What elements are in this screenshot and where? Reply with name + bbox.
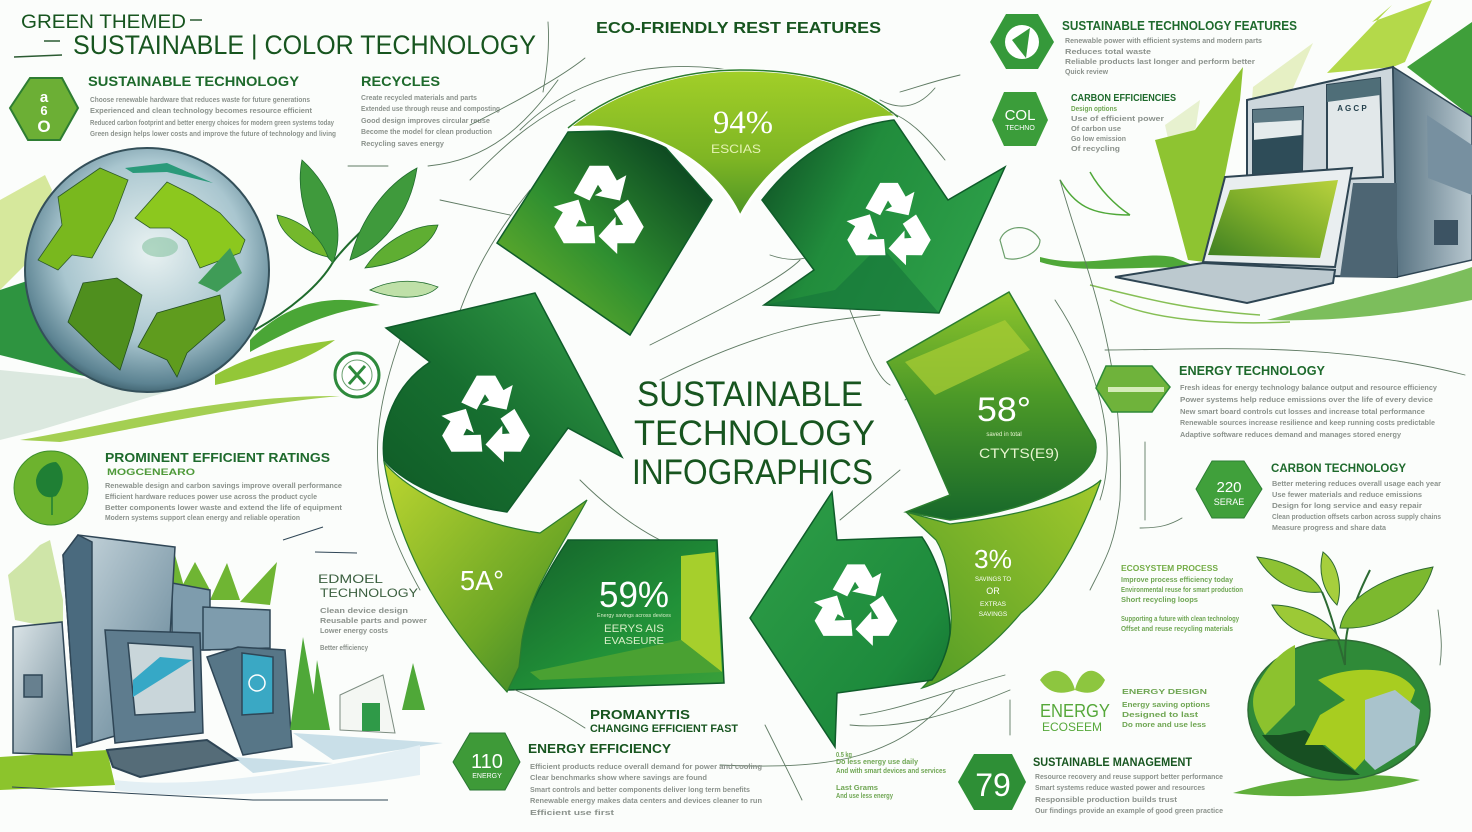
arrow: top ribbon: 94% [713, 105, 773, 141]
small note center bottom: Do less energy use daily [836, 757, 919, 766]
text block: carbon technology: Clean production offsets carbon across supply chains [1272, 512, 1441, 521]
text block: sustainable management: Smart systems reduce wasted power and resources [1035, 783, 1205, 792]
text block: combined: Of recycling [1071, 144, 1120, 153]
text block: energy technology: ENERGY TECHNOLOGY [1179, 363, 1325, 378]
text block: recycles: RECYCLES [361, 73, 440, 89]
text block: model technology [318, 572, 427, 652]
text block: combined: Of carbon use [1071, 124, 1121, 133]
text block: prominent: Modern systems support clean energy and reliable operation [105, 513, 300, 522]
text block: energy logo notes: Do more and use less [1122, 720, 1206, 729]
text block: energy logo notes: Energy saving options [1122, 700, 1210, 709]
arrow: bottom center panel [507, 540, 724, 690]
arrow: bottom center panel: EERYS AIS [604, 623, 664, 635]
text block: combined: Use of efficient power [1071, 114, 1164, 123]
sketch rings [377, 58, 1107, 766]
arrow: right: CTYTS(E9) [979, 445, 1059, 461]
text block: energy technology: Power systems help reduce emissions over the life of every device [1180, 395, 1433, 404]
text block: recycles: Extended use through reuse and composting [361, 104, 500, 113]
hexagon badge: carbon technology: SERAE [1214, 497, 1244, 507]
text block: combined: Design options [1071, 104, 1117, 113]
hexagon badge: 79 [958, 754, 1026, 810]
text block: model technology: Reusable parts and power [320, 616, 427, 625]
hexagon badge: energy efficiency: ENERGY [472, 773, 502, 780]
text block: energy efficiency: Efficient products reduce overall demand for power and cooling [530, 762, 762, 771]
server and laptop illustration [1040, 0, 1472, 323]
sketch lines top left [348, 22, 575, 325]
text block: energy efficiency [528, 741, 762, 817]
text block: prominent: PROMINENT EFFICIENT RATINGS [105, 450, 330, 465]
text block: sustainable management: SUSTAINABLE MANAGEMENT [1033, 755, 1193, 769]
arrow: right: 58° [977, 391, 1031, 429]
text block: sustainable technology [88, 73, 336, 138]
text block: energy technology: Renewable sources increase resilience and keep running costs predictable [1180, 418, 1435, 427]
hexagon badge: sustainable technology [10, 78, 78, 140]
text block: sustainable technology: SUSTAINABLE TECHNOLOGY [88, 73, 300, 89]
text block: sustainable management: Responsible production builds trust [1035, 795, 1178, 804]
hexagon badge: 79: 79 [975, 767, 1011, 803]
text block: prominent: MOGCENEARO [107, 467, 195, 477]
text block: green notes: Environmental reuse for smart production [1121, 585, 1243, 594]
arrow: bottom center panel: 59% [599, 574, 669, 615]
text block: carbon technology: CARBON TECHNOLOGY [1271, 461, 1406, 475]
text block: energy logo notes [1122, 687, 1210, 729]
text block: technology features: Reduces total waste [1065, 47, 1151, 56]
text block: prominent: Efficient hardware reduces power use across the product cycle [105, 492, 317, 501]
text block: sustainable technology: Experienced and clean technology becomes resource efficient [90, 106, 312, 115]
hexagon badge: energy efficiency [453, 733, 520, 790]
text block: prominent center: PROMANYTIS [590, 707, 690, 722]
text block: combined: Go low emission [1071, 134, 1126, 143]
energy logo: ECOSEEM [1042, 720, 1102, 734]
arrow: right lower ribbon: SAVINGS TO [975, 577, 1011, 583]
sketch lines right [1060, 180, 1465, 590]
text block: prominent: Renewable design and carbon savings improve overall performance [105, 481, 342, 490]
text block: carbon technology [1271, 461, 1441, 532]
hexagon badge: energy efficiency: 110 [471, 751, 503, 773]
small round stamp [335, 353, 379, 397]
text block: recycles: Good design improves circular reuse [361, 116, 490, 125]
arrow: top ribbon [568, 70, 960, 217]
text block: green notes: Improve process efficiency today [1121, 575, 1234, 584]
text block: prominent: Better components lower waste and extend the life of equipment [105, 503, 343, 512]
energy logo: ENERGY [1040, 701, 1110, 721]
text block: prominent [105, 450, 343, 522]
text block: green notes: ECOSYSTEM PROCESS [1121, 564, 1219, 573]
text block: green notes: Short recycling loops [1121, 595, 1198, 604]
hexagon badge: carbon technology [1196, 461, 1262, 518]
equipment illustration bottom left [0, 527, 443, 800]
arrow: right lower ribbon: OR [986, 586, 1000, 596]
text block: energy efficiency: Clear benchmarks show where savings are found [530, 773, 707, 782]
recycling loop diagram [377, 58, 1107, 766]
apple globe with leaves [1233, 552, 1441, 796]
hexagon badge: CO2: COL [1005, 107, 1035, 124]
text block: technology features: Reliable products last longer and perform better [1065, 57, 1255, 66]
small note center bottom [836, 750, 946, 800]
text block: prominent center [590, 707, 738, 735]
text block: technology features: Quick review [1065, 67, 1108, 76]
arrow: right: saved in total [986, 432, 1022, 438]
text block: recycles: Recycling saves energy [361, 139, 445, 148]
arrow: top right [762, 120, 1005, 313]
text block: carbon technology: Design for long service and easy repair [1272, 501, 1422, 510]
text block: energy technology: Adaptive software reduces demand and manages stored energy [1180, 430, 1402, 439]
text block: energy efficiency: Renewable energy makes data centers and devices cleaner to run [530, 796, 762, 805]
arrow: bottom left ribbon [384, 462, 587, 692]
arrow: top left [497, 130, 712, 335]
text block: green notes: Offset and reuse recycling materials [1121, 624, 1233, 633]
text block: sustainable technology: Green design helps lower costs and improve the future of technology and living [90, 129, 336, 138]
sketch lines bottom [515, 675, 1010, 800]
text block: technology features [1062, 18, 1297, 76]
text block: recycles: Create recycled materials and parts [361, 93, 477, 102]
text block: energy technology [1179, 363, 1438, 439]
text block: energy efficiency: Smart controls and better components deliver long term benefits [530, 785, 750, 794]
hexagon badge: sustainable technology: 6 [40, 103, 48, 118]
arrow: right lower ribbon: 3% [974, 544, 1012, 574]
arrow: bottom center panel: EVASEURE [604, 636, 664, 647]
text block: energy technology: New smart board controls cut losses and increase total performance [1180, 407, 1425, 416]
center title: INFOGRAPHICS [632, 453, 873, 492]
text block: green notes [1121, 564, 1243, 633]
text block: sustainable management: Resource recovery and reuse support better performance [1035, 772, 1223, 781]
text block: technology features: SUSTAINABLE TECHNOLOGY FEATURES [1062, 18, 1297, 33]
text block: prominent center: CHANGING EFFICIENT FAST [590, 723, 738, 735]
hexagon badge: CO2 [992, 92, 1048, 146]
text block: energy efficiency: ENERGY EFFICIENCY [528, 741, 671, 756]
title [14, 12, 536, 60]
arrow: right lower ribbon: SAVINGS [979, 611, 1008, 618]
hexagon badge: energy technology [1096, 366, 1170, 412]
small note center bottom: And with smart devices and services [836, 766, 946, 775]
arrow: right [887, 292, 1096, 520]
text block: carbon technology: Measure progress and share data [1272, 523, 1387, 532]
icon: leaf circle [14, 451, 88, 525]
text block: carbon technology: Use fewer materials and reduce emissions [1272, 490, 1422, 499]
eco-friendly heading: ECO-FRIENDLY REST FEATURES [596, 20, 881, 37]
text block: sustainable technology: Reduced carbon footprint and better energy choices for modern green systems today [90, 118, 335, 127]
text block: combined: CARBON EFFICIENCIES [1071, 93, 1176, 104]
hexagon badge: carbon technology: 220 [1216, 479, 1242, 496]
text block: carbon technology: Better metering reduces overall usage each year [1272, 479, 1441, 488]
text block: recycles: Become the model for clean production [361, 127, 492, 136]
arrow: right lower ribbon [906, 480, 1101, 688]
arrow: bottom left ribbon: 5A° [460, 565, 504, 596]
server and laptop illustration: A G C P [1337, 104, 1367, 113]
text block: energy logo notes: ENERGY DESIGN [1122, 687, 1207, 696]
text block: technology features: Renewable power with efficient systems and modern parts [1065, 36, 1262, 45]
leaf sketch right of top arrow [1000, 228, 1040, 259]
text block: model technology: TECHNOLOGY [320, 586, 418, 600]
arrow: right lower ribbon: EXTRAS [980, 601, 1007, 608]
small note center bottom: Last Grams [836, 783, 878, 792]
energy logo [1040, 671, 1110, 734]
grass sweep behind globe [0, 175, 380, 442]
text block: sustainable management [1033, 755, 1223, 815]
hexagon badge: leaf globe [990, 14, 1054, 69]
globe illustration [25, 148, 269, 392]
leaf branch [255, 160, 438, 330]
arrow: left [383, 293, 622, 512]
text block: sustainable technology: Choose renewable hardware that reduces waste for future generations [90, 95, 310, 104]
hexagon badge: sustainable technology: a [40, 89, 49, 106]
text block: energy technology: Fresh ideas for energy technology balance output and resource efficiency [1180, 383, 1438, 392]
hexagon badge: CO2: TECHNO [1005, 125, 1035, 132]
text block: green notes: Supporting a future with clean technology [1121, 614, 1240, 623]
text block: model technology: Better efficiency [320, 643, 369, 652]
arrow: bottom right [750, 492, 950, 747]
text block: model technology: Clean device design [320, 606, 408, 615]
center title: TECHNOLOGY [634, 414, 875, 453]
text block: recycles [361, 73, 500, 148]
title: GREEN THEMED [21, 12, 186, 33]
arrow: top ribbon: ESCIAS [711, 142, 761, 156]
hexagon badge: sustainable technology: O [37, 117, 51, 136]
small note center bottom: And use less energy [836, 791, 894, 800]
text block: energy logo notes: Designed to last [1122, 710, 1199, 719]
center title: SUSTAINABLE [637, 375, 863, 414]
small note center bottom: 0.5 kg [836, 750, 852, 759]
text block: combined [1071, 93, 1176, 153]
arrow: bottom center panel: Energy savings across devices [597, 613, 671, 619]
title: SUSTAINABLE | COLOR TECHNOLOGY [73, 30, 536, 60]
center title [632, 375, 875, 492]
text block: sustainable management: Our findings provide an example of good green practice [1035, 806, 1223, 815]
text block: model technology: EDMOEL [318, 572, 383, 586]
text block: energy efficiency: Efficient use first [530, 808, 615, 817]
text block: model technology: Lower energy costs [320, 626, 388, 635]
